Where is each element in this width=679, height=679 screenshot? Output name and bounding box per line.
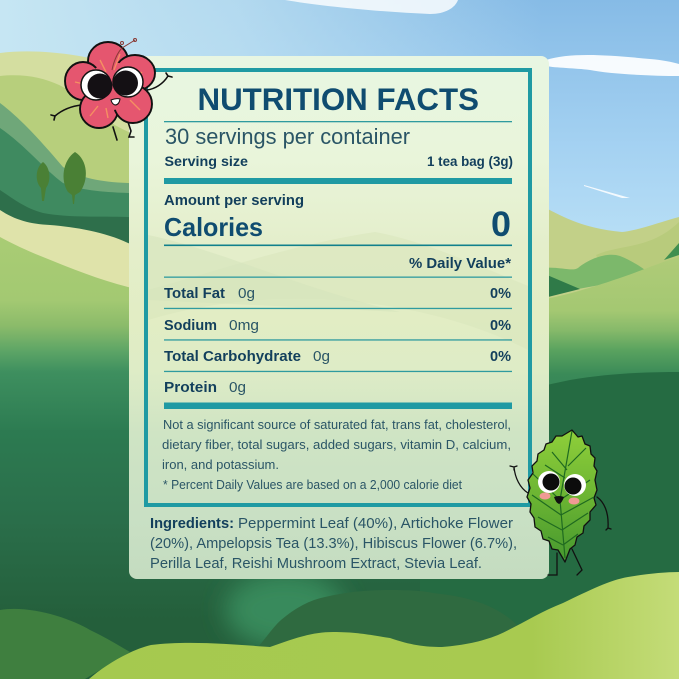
servings: Serving size xyxy=(164,153,248,169)
eyes xyxy=(81,67,143,100)
faint hills seen through panel xyxy=(148,232,528,350)
far hills, right xyxy=(540,205,679,320)
nutrient rows xyxy=(164,286,511,396)
footnotes xyxy=(162,417,511,492)
distant trees xyxy=(37,152,86,204)
calories: Amount per serving xyxy=(164,193,304,209)
winding green bands xyxy=(0,103,400,320)
nutrition panel xyxy=(129,56,549,579)
ingredients: (20%), Ampelopsis Tea (13.3%), Hibiscus Flower (6.7%), xyxy=(150,535,517,552)
nutrient rows: 0g xyxy=(229,380,246,396)
foreground hill, bottom xyxy=(89,572,679,679)
nose xyxy=(554,496,564,504)
rule lines xyxy=(164,121,512,409)
foreground hill, bottom left xyxy=(0,609,130,679)
nutrient rows: 0% xyxy=(490,349,511,365)
icon: hibiscus flower character xyxy=(51,38,172,140)
ingredients xyxy=(150,515,517,572)
footnotes: iron, and potassium. xyxy=(162,457,279,472)
title: NUTRITION FACTS xyxy=(198,81,479,117)
nutrient rows: Total Fat xyxy=(164,286,225,302)
servings: 30 servings per container xyxy=(165,124,410,149)
nutrient rows: Sodium xyxy=(164,318,217,334)
dark mound xyxy=(255,590,530,660)
ingredients: Perilla Leaf, Reishi Mushroom Extract, Stevia Leaf. xyxy=(150,555,482,572)
nutrient rows: Protein xyxy=(164,380,217,396)
servings: 1 tea bag (3g) xyxy=(427,153,513,169)
nutrient rows: 0% xyxy=(490,286,511,302)
mouth xyxy=(111,99,120,105)
green slope, left xyxy=(0,237,420,430)
calories: Calories xyxy=(164,212,263,242)
ingredients: Ingredients: xyxy=(150,515,234,532)
deep green meadow xyxy=(0,430,420,679)
nutrient rows: 0g xyxy=(313,349,330,365)
footnotes: dietary fiber, total sugars, added sugars, vitamin D, calcium, xyxy=(162,437,511,452)
near hill, right xyxy=(400,257,679,420)
calories xyxy=(164,193,511,244)
ingredients: Peppermint Leaf (40%), Artichoke Flower xyxy=(238,515,513,532)
pale hill, left xyxy=(0,51,430,330)
leaf veins xyxy=(532,431,594,558)
soft light patch xyxy=(225,572,345,648)
nutrient rows: Total Carbohydrate xyxy=(164,349,301,365)
icon: mint leaf character xyxy=(510,430,611,575)
sky xyxy=(0,0,679,300)
daily value header: % Daily Value* xyxy=(409,256,511,272)
footnotes: * Percent Daily Values are based on a 2,000 calorie diet xyxy=(163,477,462,492)
nutrient rows: 0mg xyxy=(229,318,259,334)
nutrient rows: 0g xyxy=(238,286,255,302)
servings xyxy=(164,124,513,169)
eyes xyxy=(538,471,586,496)
calories: 0 xyxy=(491,205,511,244)
cheeks xyxy=(540,492,580,504)
dark hill, right xyxy=(400,372,679,640)
teal frame xyxy=(146,70,530,505)
footnotes: Not a significant source of saturated fat, trans fat, cholesterol, xyxy=(163,417,511,432)
nutrient rows: 0% xyxy=(490,318,511,334)
clouds xyxy=(285,0,679,198)
